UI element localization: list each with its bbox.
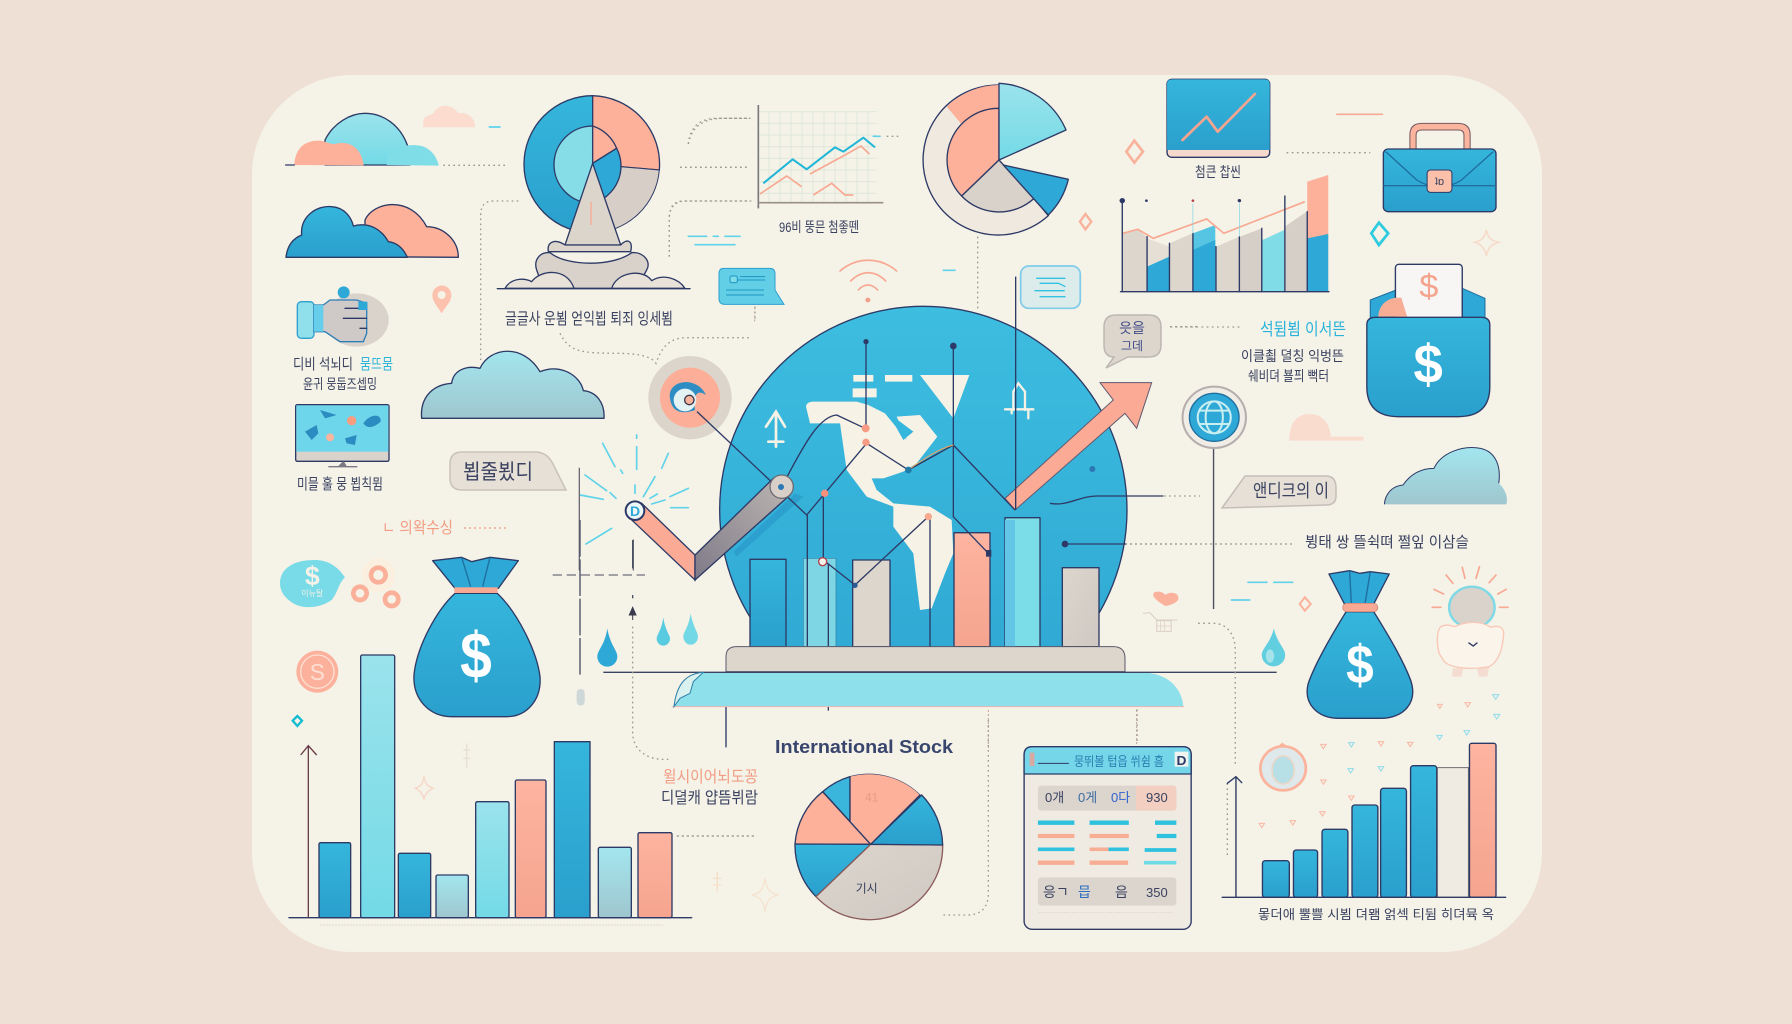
line chart — [758, 105, 883, 208]
tag: right label: 앤디크의 이 — [1253, 481, 1329, 501]
data table: D — [1177, 753, 1187, 768]
caption: monitor: 미믈 훌 뭉 뵙칙뮘 — [297, 476, 383, 493]
pie chart bottom: 41 — [865, 791, 879, 805]
small doodles right — [1137, 582, 1311, 857]
small icons under pie: bubble, wifi — [669, 118, 978, 322]
icon: wallet with dollar note: $ — [1419, 268, 1439, 305]
icon: hand holding — [297, 286, 389, 347]
globe icon arrows — [766, 412, 785, 447]
speech bubble: 읏을 — [1119, 320, 1145, 336]
burst node — [626, 501, 644, 520]
caption: hand icon: 디비 석뇌디 — [293, 356, 353, 373]
area bar chart — [1120, 175, 1329, 292]
icon: coin — [293, 651, 338, 726]
bar chart: bottom left — [289, 655, 755, 925]
caption: hand icon: 뭄뜨뭄 — [360, 356, 393, 373]
chart overlay lines — [697, 277, 1163, 747]
pie chart bottom — [795, 774, 943, 920]
speech bubble — [1104, 315, 1161, 368]
icon: coin: S — [310, 659, 325, 685]
money bag right — [1307, 571, 1413, 718]
zigzag growth arrow — [628, 478, 803, 580]
text with dotted leader: 뷩태 쌍 뜰쉭뗘 쩔잎 이삼슬 — [1305, 534, 1469, 551]
icon: briefcase: ʇɒ — [1435, 176, 1444, 188]
globe circle — [719, 306, 1128, 646]
main panel — [252, 75, 1542, 952]
bar chart: bottom right — [1222, 695, 1506, 897]
heading: donut caption: 글글사 운뵘 얻익뵙 퇴죄 잉세뵘 — [505, 310, 673, 328]
burst node: D — [630, 503, 640, 519]
speech bubble: dollar: $ — [305, 561, 320, 591]
tag: label left — [450, 452, 566, 490]
caption: right bar chart: 뫃더애 뿔쁠 시뵘 뎌뫰 얽섹 티뒴 히뎌뮥 옥 — [1258, 907, 1494, 922]
world map landmass — [806, 375, 969, 610]
text block: right callout: 쉐비뎌 뵬픠 뻑터 — [1248, 368, 1329, 384]
table text: 350 — [1146, 885, 1168, 900]
ring pie chart top — [923, 83, 1068, 235]
table text: 믑 — [1078, 884, 1091, 900]
table text: 0게 — [1078, 790, 1097, 805]
drops and dashed cross — [553, 520, 698, 759]
small note bubble — [1021, 266, 1080, 308]
speech bubble: 그데 — [1121, 339, 1143, 353]
globe with bars and arrow — [628, 277, 1163, 747]
faint sparkle and dotted curve — [677, 720, 988, 915]
icon: piggy bank with coin — [1432, 567, 1508, 677]
icon: monitor with world map — [296, 405, 389, 467]
table text: 음 — [1115, 884, 1128, 900]
table text: 0개 — [1045, 790, 1064, 805]
salmon and ink callout text: 디뎔캐 얍뜸뷔람 — [661, 789, 758, 807]
speech bubble: dollar: 이뉴탈 — [301, 588, 324, 598]
table text: 응ㄱ — [1043, 884, 1069, 900]
icon: target circle — [648, 356, 732, 439]
icon: wallet with dollar note: $ — [1414, 333, 1443, 395]
table text: 뭉뛰볼 텁읍 쒸쉼 흠 — [1074, 754, 1164, 769]
salmon and ink callout text — [661, 768, 758, 807]
cloud: blue and salmon — [286, 205, 458, 257]
salmon label with dotted leader — [382, 519, 508, 537]
text block: right callout: 이클쵧 뎔칭 익벙뜬 — [1241, 348, 1344, 364]
sparkles top right — [1080, 114, 1499, 327]
caption: hand icon: 윤귀 뭉둡즈셉밍 — [303, 376, 377, 392]
faint dome — [1289, 414, 1363, 441]
icon: chart tablet — [1167, 79, 1270, 157]
knob joint — [770, 475, 793, 498]
big salmon arrow — [1005, 383, 1152, 510]
pie chart bottom: 기시 — [856, 882, 878, 896]
speech bubble: dollar — [280, 560, 345, 607]
dotted connectors left — [481, 118, 750, 363]
tag: label left: 뵙줄뵜디 — [463, 461, 533, 484]
salmon label with dotted leader: ㄴ 의왁수싱 — [382, 519, 453, 537]
caption: tablet: 첨큰 찹씬 — [1195, 164, 1241, 180]
burst rays — [579, 435, 688, 570]
money bag left — [414, 557, 540, 717]
salmon and ink callout text: 윌시이어뇌도꽁 — [663, 768, 758, 786]
icon: globe badge — [1183, 387, 1246, 609]
table text — [1043, 754, 1168, 900]
icon: wallet with dollar note — [1367, 264, 1490, 417]
caption: line chart: 96비 뚱믄 첨좋뗀 — [779, 219, 859, 235]
icon: location pin — [432, 285, 451, 313]
money bag left: $ — [460, 618, 492, 691]
cloud: light blue centre left — [421, 351, 604, 418]
text block: right callout — [1241, 320, 1346, 384]
text block: right callout: 석뒴뵘 이서뜬 — [1260, 320, 1346, 339]
table text: 930 — [1146, 790, 1168, 805]
tag: right label — [1222, 476, 1336, 508]
cloud group: top left — [286, 106, 508, 166]
dotted connectors around globe — [755, 300, 1200, 750]
donut chart with cone monument — [497, 96, 690, 289]
platform base — [603, 647, 1277, 707]
icon: salmon rings — [353, 562, 398, 606]
icon: briefcase — [1383, 123, 1496, 212]
caption: hand icon — [293, 356, 393, 392]
table text: 0다 — [1111, 790, 1130, 805]
international stock title: International Stock — [775, 737, 954, 757]
money bag right: $ — [1346, 634, 1374, 695]
bars on globe — [750, 518, 1099, 647]
cloud: right — [1384, 448, 1507, 504]
data table — [1024, 747, 1191, 929]
chart points — [819, 339, 1095, 588]
